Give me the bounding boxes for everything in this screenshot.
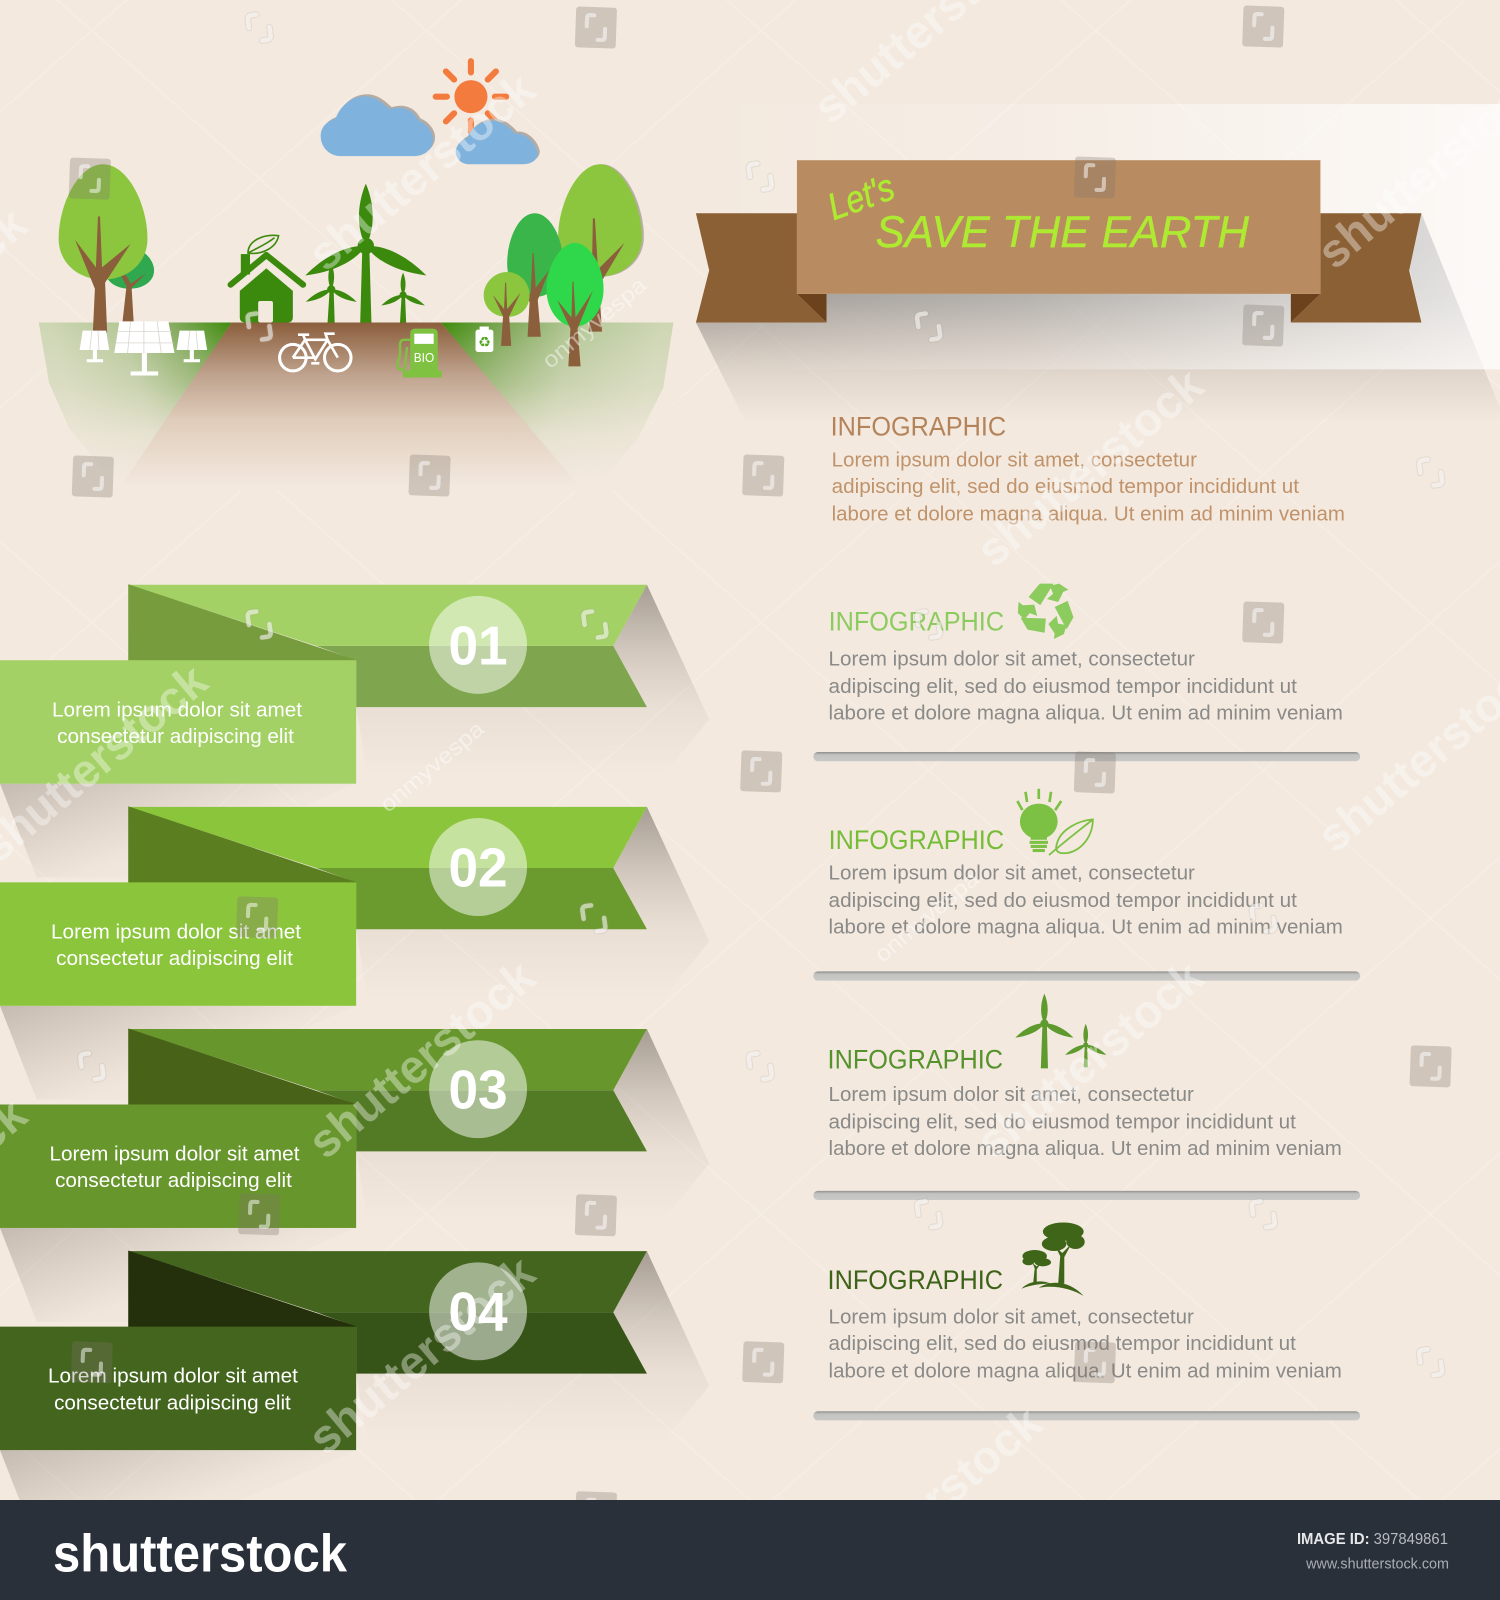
footer logo: shutterstock [53,1524,347,1583]
icon: small wind turbine left [305,263,358,322]
image id: IMAGE ID: 397849861 [1297,1531,1448,1548]
icon: right bright tree [546,243,604,366]
icon: solar panels [80,321,207,376]
ribbon 03 shadow [356,1029,709,1220]
icon: left big tree [59,164,147,333]
icon: cloud large [321,94,435,156]
banner long shadow [696,213,1500,420]
heading 1: INFOGRAPHIC [829,607,1004,637]
icon: sun [436,61,506,132]
number badge 02 [429,818,527,916]
icon: recycle arrows [1013,584,1079,642]
icon: recycling battery [476,327,493,352]
box 02 shadow [0,1006,356,1100]
body text 4: adipiscing elit, sed do eiusmod tempor incididunt ut [829,1333,1296,1355]
body text [832,449,1345,525]
body text 4: Lorem ipsum dolor sit amet, consectetur [829,1306,1194,1328]
watermark overlay: shutterstock [298,1245,545,1464]
caption box 01: consectetur adipiscing elit [57,726,294,748]
text block 3: wind power [828,994,1342,1160]
body text 2: adipiscing elit, sed do eiusmod tempor incididunt ut [829,890,1297,912]
body text 1: labore et dolore magna aliqua. Ut enim ad minim veniam [829,702,1343,724]
body text: labore et dolore magna aliqua. Ut enim ad minim veniam [832,503,1345,525]
panel: ribbon 01 [0,585,709,878]
body text 4: labore et dolore magna aliqua. Ut enim ad minim veniam [829,1361,1342,1383]
heading 4: INFOGRAPHIC [828,1265,1003,1295]
watermark overlay: onmyvespa [375,716,489,817]
text block 4: trees [828,1222,1342,1383]
panel: ribbon 03 [0,1029,709,1322]
caption box 02: Lorem ipsum dolor sit amet [51,921,302,943]
watermark overlay: shutterstock [967,358,1213,576]
body text 1 [829,648,1343,724]
text block 1: recycle [829,584,1343,724]
body text 2 [829,863,1343,939]
icon: right small tree [484,272,530,346]
heading: infographic: INFOGRAPHIC [831,412,1006,442]
icon: bio fuel pump [397,329,442,378]
number badge 01: 01 [448,614,508,676]
number badge 01 [429,596,527,694]
body text: adipiscing elit, sed do eiusmod tempor incididunt ut [832,476,1299,498]
ribbon main panel [797,160,1320,294]
ground: road [120,322,580,487]
watermark overlay: shutterstock [298,62,545,281]
caption box 03 [0,1104,356,1228]
watermark overlay: shutterstock [967,949,1213,1168]
body text 2: Lorem ipsum dolor sit amet, consectetur [829,863,1195,885]
icon: bulb and leaf [1017,789,1093,855]
body text 3: Lorem ipsum dolor sit amet, consectetur [829,1084,1194,1106]
caption box 02 [0,882,356,1006]
number badge 03 [429,1040,527,1138]
number badge 02: 02 [448,836,508,898]
panel: eco landscape illustration [31,61,684,491]
body text 1: adipiscing elit, sed do eiusmod tempor incididunt ut [829,676,1297,698]
body text 2: labore et dolore magna aliqua. Ut enim ad minim veniam [829,917,1343,939]
website url: www.shutterstock.com [1305,1556,1449,1572]
box 01 shadow [0,784,356,878]
number badge 04: 04 [448,1281,508,1343]
ribbon right tail [1291,213,1421,322]
body text 4 [829,1306,1342,1383]
text: BIO: BIO [414,350,434,365]
icon: recycling battery: ♻ [478,335,491,351]
body text 3: adipiscing elit, sed do eiusmod tempor incididunt ut [829,1112,1296,1134]
body text 1: Lorem ipsum dolor sit amet, consectetur [829,648,1195,670]
watermark overlay: onmyvespa [537,272,651,373]
caption box 04: consectetur adipiscing elit [54,1392,291,1414]
ribbon 02 shadow [356,807,709,998]
box 03 shadow [0,1228,356,1322]
number badge 03: 03 [448,1059,508,1121]
ground: left grass [39,322,232,490]
icon: left small tree [105,248,154,322]
icon: tree silhouette [1021,1222,1085,1296]
ribbon 01 shadow [356,585,709,776]
caption box 03: consectetur adipiscing elit [55,1170,292,1192]
icon: bicycle [280,334,351,371]
body text 3: labore et dolore magna aliqua. Ut enim ad minim veniam [829,1138,1342,1160]
icon: large wind turbine [302,184,429,322]
watermark overlay: onmyvespa [870,866,984,967]
caption box 02: consectetur adipiscing elit [56,948,293,970]
body text 3 [829,1084,1342,1160]
text block 2: light bulb [829,789,1343,939]
ribbon left tail [696,213,827,322]
caption box 01: Lorem ipsum dolor sit amet [52,699,303,721]
caption box 01 [0,660,356,784]
text: Let's: Let's [822,165,900,228]
watermark overlay: shutterstock [298,949,545,1168]
icon: right big tree [558,164,644,332]
number badge 04 [429,1262,527,1360]
ground: right grass [441,322,673,490]
icon: right medium tree [507,213,563,337]
caption box 03: Lorem ipsum dolor sit amet [49,1144,300,1166]
body text: Lorem ipsum dolor sit amet, consectetur [832,449,1197,471]
panel: ribbon 02 [0,807,709,1100]
ribbon 04 shadow [356,1251,709,1442]
icon: eco house [231,235,303,322]
heading 2: INFOGRAPHIC [829,825,1004,855]
caption box 04 [0,1327,356,1450]
text block: intro [831,412,1345,525]
panel: ribbon 04 [0,1251,709,1544]
text: SAVE THE EARTH: SAVE THE EARTH [876,206,1250,257]
footer bar [0,1500,1500,1600]
icon: cloud small [456,119,540,164]
icon: small wind turbine right [380,272,426,322]
panel: save the earth ribbon banner [696,160,1421,322]
icon: wind turbines [1014,994,1107,1068]
caption box 04: Lorem ipsum dolor sit amet [48,1366,298,1388]
heading 3: INFOGRAPHIC [828,1044,1003,1074]
box 04 shadow [0,1450,356,1544]
